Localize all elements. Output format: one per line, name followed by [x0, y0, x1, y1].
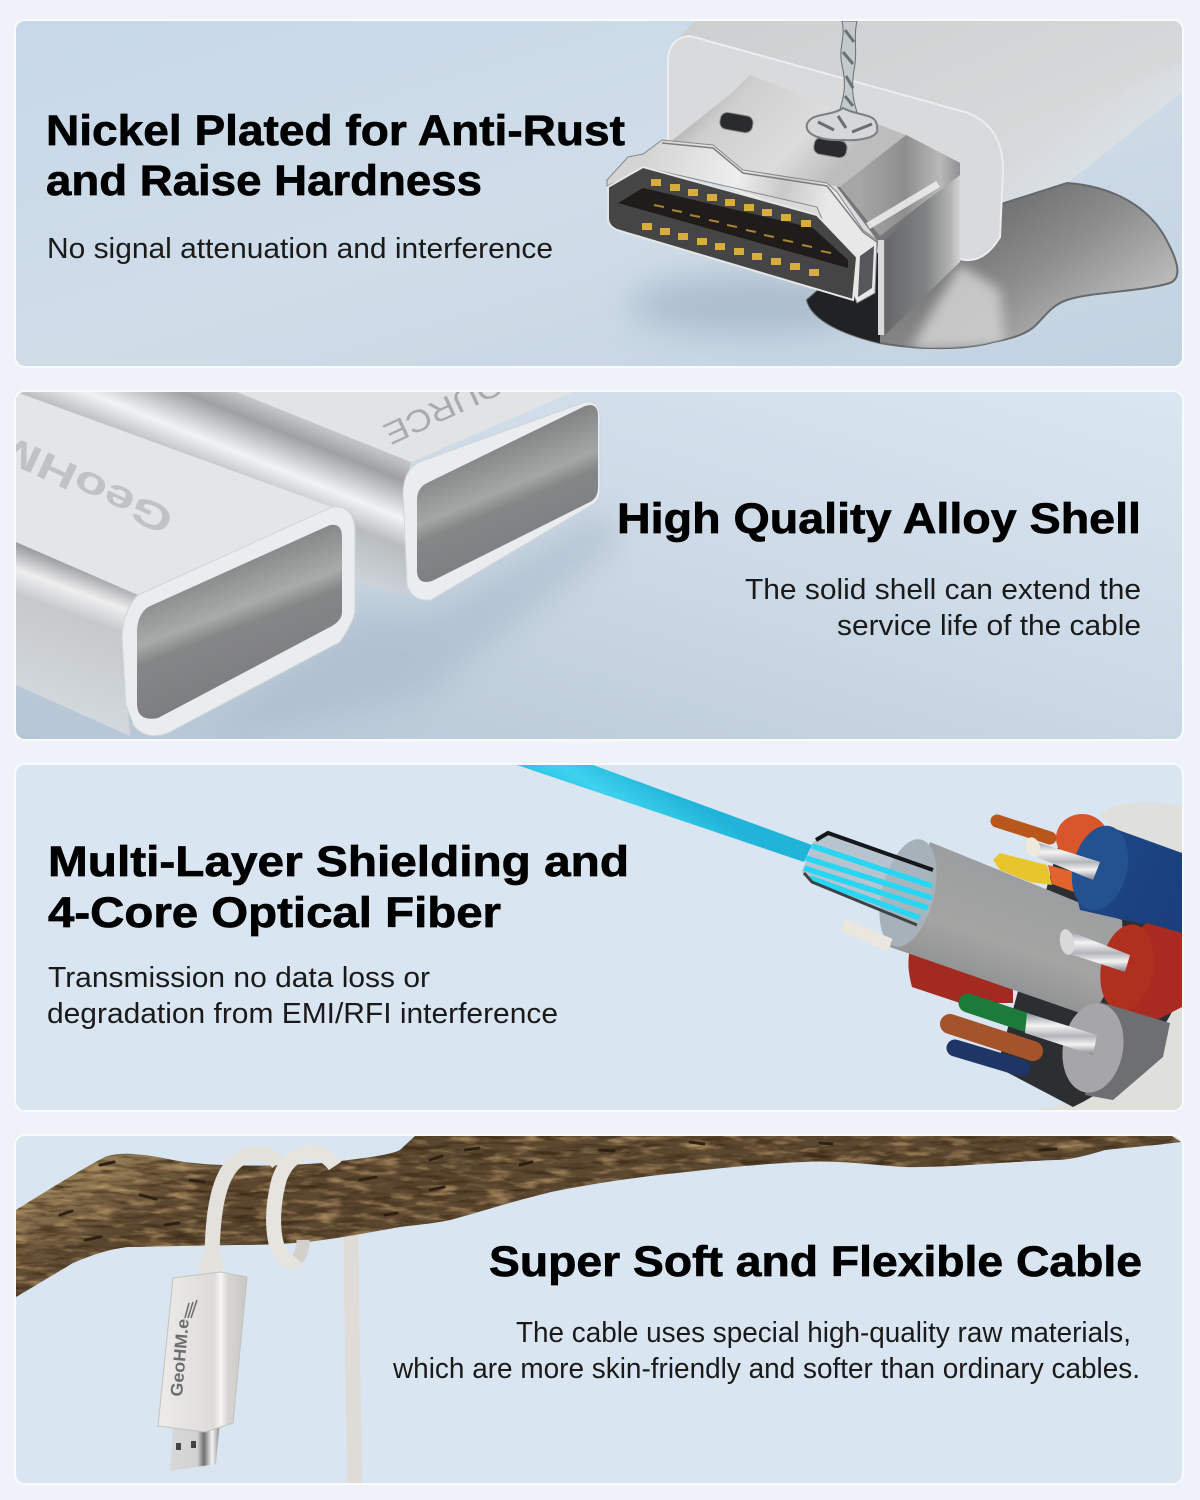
blue wire body [1076, 827, 1182, 933]
glass tube [802, 833, 933, 925]
outer jacket bottom [1040, 990, 1182, 1110]
housing logo: GeoHM.e [167, 1318, 193, 1397]
housing logo stripes [185, 1300, 197, 1318]
rear tube side [16, 392, 411, 595]
connector side wall [885, 170, 960, 335]
subtext: flexible cable [392, 1317, 1140, 1385]
connector top plate [650, 75, 906, 187]
illustration: cable on a branch [16, 1136, 1182, 1484]
metal shell body [680, 21, 1182, 150]
illustration: cable cross-section [517, 765, 1182, 1110]
grey lower wire face [1056, 998, 1130, 1098]
connector side underlay [837, 135, 960, 335]
panel: nickel plated [15, 20, 1183, 367]
front tube side [16, 542, 138, 736]
illustration: alloy shell tubes [16, 392, 614, 736]
subtext: alloy shell: service life of the cable [837, 610, 1141, 642]
subtext: shielding [47, 962, 558, 1030]
connector face [608, 167, 857, 300]
rim dark line [662, 143, 877, 242]
bottom contact row [642, 223, 819, 276]
red wire body [1100, 923, 1182, 1020]
connector wall top [840, 135, 960, 236]
metal shell frame [668, 36, 1003, 260]
light fan [910, 264, 1005, 350]
branch [16, 1136, 1182, 1301]
metal shell side [1048, 67, 1182, 187]
yellow wire [993, 853, 1052, 885]
heading: shielding: Multi-Layer Shielding and [48, 838, 629, 886]
heading: nickel plated: Nickel Plated for Anti-Rust [46, 107, 625, 155]
subtext: flexible cable: The cable uses special high-quality raw materials, [516, 1317, 1131, 1349]
bark light grain [16, 1136, 1182, 1301]
front tube opening [137, 525, 342, 719]
splash streaks [818, 116, 872, 132]
dark pool left [807, 254, 880, 343]
nickel puddle [807, 183, 1177, 348]
red wire face [1094, 920, 1160, 1016]
floor shadow [248, 516, 614, 720]
heading: alloy shell: High Quality Alloy Shell [617, 495, 1141, 543]
collar [200, 1258, 223, 1275]
front tube top face [16, 392, 332, 595]
orange wire sleeve [1056, 814, 1108, 862]
branch base [16, 1136, 1182, 1301]
cable over branch [212, 1154, 278, 1268]
liquid splash [807, 108, 877, 140]
white strand [843, 925, 890, 945]
illustration: HDMI connector with liquid nickel [607, 21, 1182, 350]
liquid stream [839, 21, 857, 112]
loop lower section [290, 1240, 303, 1262]
wall highlight [868, 184, 938, 226]
panel: flexible cable [15, 1135, 1183, 1484]
panel: shielding [15, 764, 1183, 1111]
brown wire [950, 1024, 1033, 1051]
connector plug [170, 1422, 220, 1471]
subtext: flexible cable: which are more skin-friendly and softer than ordinary cables. [392, 1353, 1140, 1385]
subtext: alloy shell: The solid shell can extend the [745, 574, 1141, 606]
cable loop [274, 1152, 335, 1262]
chrome rim [607, 140, 877, 303]
subtext: alloy shell [745, 574, 1141, 642]
rear tube top face [237, 392, 573, 462]
top contact row [651, 179, 811, 227]
plug holes [176, 1441, 196, 1450]
glass lower edge [804, 873, 917, 925]
heading: shielding: 4-Core Optical Fiber [48, 889, 501, 937]
fibers [804, 846, 932, 918]
plate hole left [719, 111, 754, 134]
silver strand blue [1027, 840, 1100, 880]
grey core end [869, 833, 947, 953]
front tube frame [122, 507, 355, 736]
stream twists [843, 30, 854, 106]
dark red wire [908, 950, 1013, 1003]
optical beam [517, 765, 812, 862]
rear tube SOURCE mark: SOURCE [378, 356, 531, 452]
bark pits [60, 1142, 1056, 1240]
plate hole right [813, 138, 848, 158]
panel 1 card [15, 20, 1183, 367]
panel 2 card [15, 391, 1183, 740]
heading: flexible cable: Super Soft and Flexible Cable [489, 1238, 1142, 1286]
green wire [968, 1003, 1025, 1022]
heading: nickel plated [46, 107, 625, 205]
chrome wall strip [878, 240, 884, 335]
panel: alloy shell [0, 356, 1183, 740]
panel 3 card [15, 764, 1183, 1111]
rear tube frame [403, 402, 600, 600]
strand end blue [1023, 835, 1043, 859]
soft shadow [630, 275, 870, 335]
jacket interior [997, 840, 1182, 1107]
silver strand red [1064, 930, 1130, 972]
heading: shielding [48, 838, 629, 937]
puddle reflection [807, 254, 1012, 348]
middle contact row [654, 205, 831, 253]
grey lower wire body [1085, 1002, 1170, 1100]
orange wire lower [1048, 865, 1074, 892]
rim right block [858, 246, 874, 297]
subtext: shielding: Transmission no data loss or [48, 962, 430, 994]
contact slot [618, 188, 848, 268]
subtext: shielding: degradation from EMI/RFI interference [47, 998, 558, 1030]
hanging cable [351, 1230, 355, 1484]
silver strand lower [1025, 1013, 1097, 1055]
rear tube opening [417, 405, 598, 582]
glass top edge [816, 833, 933, 870]
copper strand [997, 821, 1050, 838]
blue wire face [1063, 820, 1137, 916]
heading: nickel plated: and Raise Hardness [46, 157, 482, 205]
bark dark grain [16, 1136, 1182, 1301]
front tube logo: GeoHM [0, 424, 180, 542]
strand end red [1058, 928, 1076, 956]
navy wire [955, 1048, 1022, 1068]
panel 4 card [15, 1135, 1183, 1484]
outer jacket top [1100, 802, 1182, 862]
grey core jacket [890, 842, 1125, 1013]
connector housing [158, 1272, 247, 1432]
subtext: nickel plated: No signal attenuation and interference [47, 233, 553, 265]
